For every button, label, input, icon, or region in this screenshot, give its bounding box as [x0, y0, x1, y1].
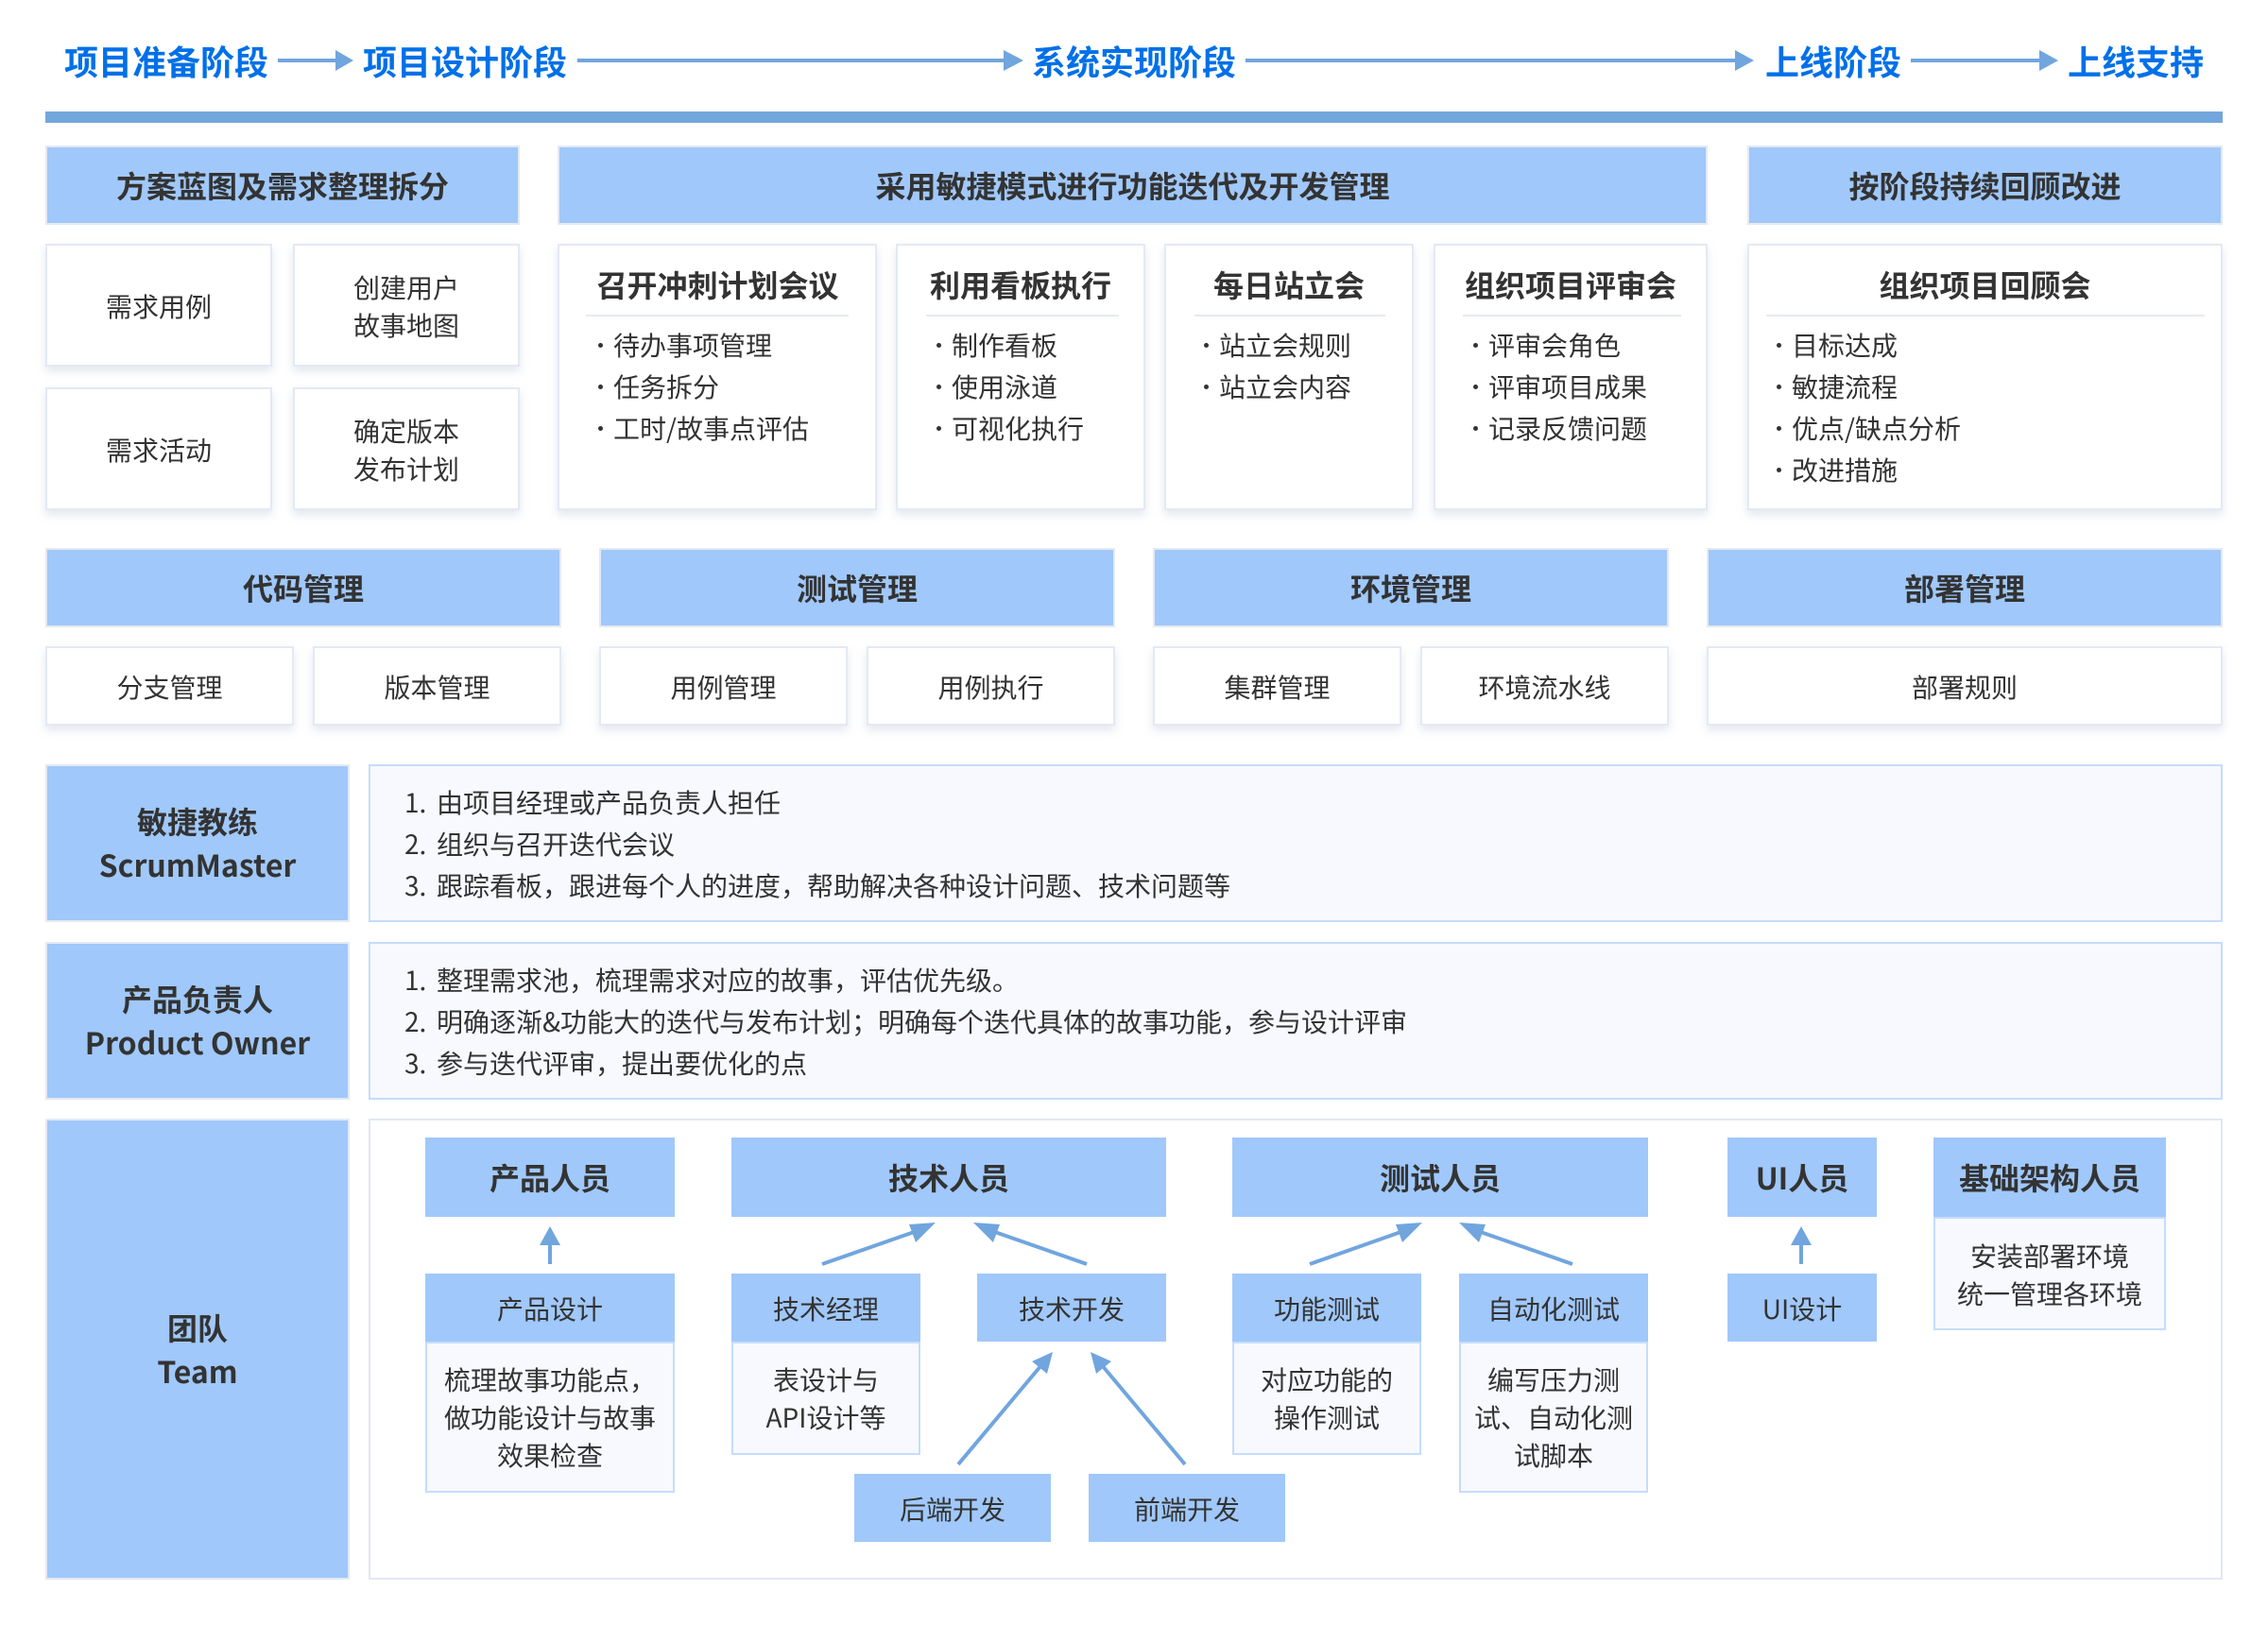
panel: 利用看板执行: 制作看板 — [952, 325, 1057, 363]
card: 用例管理: 用例管理 — [670, 668, 777, 706]
heading: 产品人员: 产品人员 — [490, 1155, 610, 1199]
list — [404, 783, 1230, 904]
card title: 组织项目评审会 — [1465, 263, 1676, 306]
heading: 方案蓝图及需求整理拆分 — [45, 145, 520, 225]
list: 整理需求池，梳理需求对应的故事，评估优先级。 — [437, 961, 1019, 999]
list — [1194, 315, 1385, 404]
list: 2. — [404, 1002, 426, 1040]
role: 团队 Team: Team — [157, 1349, 238, 1393]
sub heading: 技术开发 — [977, 1274, 1166, 1342]
role: 产品负责人 Product Owner — [45, 942, 350, 1100]
phase arrows — [278, 50, 2058, 71]
divider list — [586, 315, 849, 446]
description: 产品设计: 梳理故事功能点， — [444, 1360, 656, 1398]
description: 自动化测试 — [1459, 1342, 1648, 1493]
heading: 部署管理 — [1707, 548, 2223, 627]
sub heading: 功能测试 — [1232, 1274, 1421, 1342]
sub heading: UI设计: UI设计 — [1762, 1290, 1842, 1327]
sub heading: UI设计 — [1727, 1274, 1877, 1342]
sub heading: 前端开发: 前端开发 — [1134, 1490, 1240, 1528]
panel: 组织项目回顾会: 改进措施 — [1792, 450, 1898, 488]
heading: 产品人员 — [425, 1138, 675, 1217]
panel: 召开冲刺计划会议: 工时/故事点评估 — [613, 408, 809, 446]
sub heading: 后端开发 — [854, 1474, 1051, 1542]
heading: 技术人员 — [731, 1138, 1166, 1217]
arrow: 技术开发到技术人员 — [973, 1223, 1087, 1264]
description: 产品设计: 做功能设计与故事 — [444, 1398, 656, 1436]
card: 创建用户故事地图 — [293, 244, 520, 367]
card: 部署规则: 部署规则 — [1912, 668, 2018, 706]
heading: 测试管理 — [599, 548, 1115, 627]
card: 用例执行 — [867, 646, 1115, 726]
panel: 利用看板执行 — [896, 244, 1145, 510]
role description: 敏捷教练 — [369, 764, 2223, 922]
list: 参与迭代评审，提出要优化的点 — [437, 1044, 807, 1082]
description: 技术经理: API设计等 — [766, 1398, 885, 1436]
panel: 召开冲刺计划会议 — [558, 244, 877, 510]
card: 环境流水线: 环境流水线 — [1478, 668, 1610, 706]
arrow: 前端开发到技术开发 — [1091, 1352, 1185, 1464]
description: 技术经理: 表设计与 — [773, 1360, 879, 1398]
description: 技术经理 — [731, 1342, 920, 1455]
panel: 每日站立会: 站立会内容 — [1219, 367, 1351, 404]
heading: 按阶段持续回顾改进 — [1747, 145, 2223, 225]
role: 团队 Team — [45, 1119, 350, 1580]
card: 需求活动: 需求活动 — [106, 431, 212, 469]
heading: 代码管理 — [45, 548, 561, 627]
list: 2. — [404, 825, 426, 863]
description: 基础架构人员 — [1933, 1217, 2166, 1330]
heading: 基础架构人员: 基础架构人员 — [1959, 1155, 2140, 1199]
card: 创建用户故事地图: 创建用户 — [353, 268, 459, 306]
description: 自动化测试: 编写压力测 — [1487, 1360, 1620, 1398]
role: 产品负责人 Product Owner: 产品负责人 — [122, 977, 273, 1020]
panel: 组织项目评审会: 评审项目成果 — [1488, 367, 1647, 404]
card: 集群管理 — [1153, 646, 1401, 726]
role description: 产品负责人 — [369, 942, 2223, 1100]
card: 集群管理: 集群管理 — [1224, 668, 1331, 706]
arrow: 实现到上线 — [1246, 50, 1754, 71]
phase: 上线阶段: 上线阶段 — [1765, 36, 1901, 85]
description: 功能测试: 操作测试 — [1274, 1398, 1380, 1436]
panel: 组织项目评审会 — [1434, 244, 1708, 510]
heading: 环境管理: 环境管理 — [1350, 566, 1471, 609]
sub heading: 后端开发: 后端开发 — [900, 1490, 1005, 1528]
description: 自动化测试: 试脚本 — [1514, 1436, 1593, 1474]
heading: 采用敏捷模式进行功能迭代及开发管理 — [558, 145, 1708, 225]
sub heading: 自动化测试: 自动化测试 — [1487, 1290, 1620, 1327]
description: 基础架构人员: 安装部署环境 — [1970, 1237, 2129, 1274]
arrow: 准备到设计 — [278, 50, 353, 71]
sub heading: 技术开发: 技术开发 — [1019, 1290, 1125, 1327]
heading: 部署管理: 部署管理 — [1904, 566, 2025, 609]
card: 确定版本发布计划 — [293, 387, 520, 510]
heading: 基础架构人员 — [1933, 1138, 2166, 1217]
heading: 方案蓝图及需求整理拆分: 方案蓝图及需求整理拆分 — [116, 163, 449, 207]
card title: 每日站立会 — [1213, 263, 1365, 306]
arrow: UI设计到UI人员 — [1791, 1226, 1812, 1264]
panel: 利用看板执行: 可视化执行 — [952, 408, 1084, 446]
panel: 组织项目评审会: 记录反馈问题 — [1488, 408, 1647, 446]
arrow: 自动化测试到测试人员 — [1459, 1223, 1572, 1264]
phase: 系统实现阶段: 系统实现阶段 — [1032, 36, 1236, 85]
phase bar — [45, 111, 2223, 123]
heading: 代码管理: 代码管理 — [243, 566, 364, 609]
heading: 技术人员: 技术人员 — [888, 1155, 1009, 1199]
card: 需求活动 — [45, 387, 272, 510]
card: 需求用例 — [45, 244, 272, 367]
panel: 组织项目回顾会: 目标达成 — [1792, 325, 1898, 363]
arrow: 功能测试到测试人员 — [1310, 1223, 1422, 1264]
card title: 组织项目回顾会 — [1879, 263, 2090, 306]
card title: 召开冲刺计划会议 — [596, 263, 839, 306]
panel: 组织项目回顾会 — [1747, 244, 2223, 510]
heading: UI人员 — [1727, 1138, 1877, 1217]
card: 确定版本发布计划: 发布计划 — [353, 450, 459, 488]
list: 跟踪看板，跟进每个人的进度，帮助解决各种设计问题、技术问题等 — [437, 866, 1230, 904]
heading: 测试人员: 测试人员 — [1380, 1155, 1501, 1199]
card: 版本管理: 版本管理 — [384, 668, 490, 706]
role: 敏捷教练 ScrumMaster — [45, 764, 350, 922]
role: 团队 Team: 团队 — [167, 1306, 228, 1349]
sub heading: 前端开发 — [1089, 1474, 1285, 1542]
phase: 项目准备阶段: 项目准备阶段 — [64, 36, 268, 85]
card: 确定版本发布计划: 确定版本 — [353, 412, 459, 450]
card title: 利用看板执行 — [930, 263, 1111, 306]
list: 3. — [404, 1044, 426, 1082]
list: 1. — [404, 783, 426, 821]
sub heading: 产品设计 — [425, 1274, 675, 1342]
panel: 每日站立会 — [1164, 244, 1414, 510]
list: 由项目经理或产品负责人担任 — [437, 783, 781, 821]
panel: 召开冲刺计划会议: 待办事项管理 — [613, 325, 772, 363]
heading: UI人员: UI人员 — [1756, 1155, 1848, 1199]
sub heading: 自动化测试 — [1459, 1274, 1648, 1342]
sub heading: 技术经理: 技术经理 — [773, 1290, 879, 1327]
panel: 召开冲刺计划会议: 任务拆分 — [613, 367, 719, 404]
arrow: 设计到实现 — [577, 50, 1023, 71]
description: 自动化测试: 试、自动化测 — [1474, 1398, 1633, 1436]
list — [404, 961, 1407, 1082]
heading: 采用敏捷模式进行功能迭代及开发管理: 采用敏捷模式进行功能迭代及开发管理 — [875, 163, 1389, 207]
role: 产品负责人 Product Owner: Product Owner — [85, 1020, 310, 1064]
card: 分支管理 — [45, 646, 294, 726]
list: 明确逐渐&功能大的迭代与发布计划；明确每个迭代具体的故事功能，参与设计评审 — [437, 1002, 1407, 1040]
heading: 测试管理: 测试管理 — [797, 566, 918, 609]
list — [1766, 315, 2205, 488]
card: 用例管理 — [599, 646, 848, 726]
heading: 按阶段持续回顾改进: 按阶段持续回顾改进 — [1848, 163, 2121, 207]
panel: 组织项目评审会: 评审会角色 — [1488, 325, 1621, 363]
list — [1463, 315, 1681, 446]
panel: 团队 — [369, 1119, 2223, 1580]
list: 3. — [404, 866, 426, 904]
arrow: 技术经理到技术人员 — [822, 1223, 936, 1264]
sub heading: 功能测试: 功能测试 — [1274, 1290, 1380, 1327]
card: 创建用户故事地图: 故事地图 — [353, 306, 459, 344]
phase: 上线支持: 上线支持 — [2068, 36, 2204, 85]
description: 功能测试: 对应功能的 — [1261, 1360, 1393, 1398]
arrow: 上线到支持 — [1911, 50, 2058, 71]
card: 环境流水线 — [1420, 646, 1669, 726]
team arrows — [540, 1223, 1812, 1466]
list: 组织与召开迭代会议 — [437, 825, 675, 863]
panel: 组织项目回顾会: 敏捷流程 — [1792, 367, 1898, 404]
arrow: 后端开发到技术开发 — [958, 1352, 1053, 1464]
arrow: 产品设计到产品人员 — [540, 1226, 560, 1264]
description: 产品设计: 效果检查 — [497, 1436, 603, 1474]
description: 产品设计 — [425, 1342, 675, 1493]
sub heading: 技术经理 — [731, 1274, 920, 1342]
panel: 组织项目回顾会: 优点/缺点分析 — [1792, 408, 1961, 446]
panel: 每日站立会: 站立会规则 — [1219, 325, 1351, 363]
panel: 利用看板执行: 使用泳道 — [952, 367, 1057, 404]
sub heading: 产品设计: 产品设计 — [497, 1290, 603, 1327]
role: 敏捷教练 ScrumMaster: ScrumMaster — [99, 843, 296, 886]
card: 部署规则 — [1707, 646, 2223, 726]
role: 敏捷教练 ScrumMaster: 敏捷教练 — [137, 799, 258, 843]
card: 需求用例: 需求用例 — [106, 287, 212, 325]
description: 基础架构人员: 统一管理各环境 — [1957, 1274, 2142, 1312]
description: 功能测试 — [1232, 1342, 1421, 1455]
phase: 项目设计阶段: 项目设计阶段 — [363, 36, 567, 85]
card: 分支管理: 分支管理 — [116, 668, 223, 706]
card: 版本管理 — [313, 646, 561, 726]
list: 1. — [404, 961, 426, 999]
heading: 测试人员 — [1232, 1138, 1648, 1217]
heading: 环境管理 — [1153, 548, 1669, 627]
card: 用例执行: 用例执行 — [937, 668, 1043, 706]
list — [926, 315, 1119, 446]
